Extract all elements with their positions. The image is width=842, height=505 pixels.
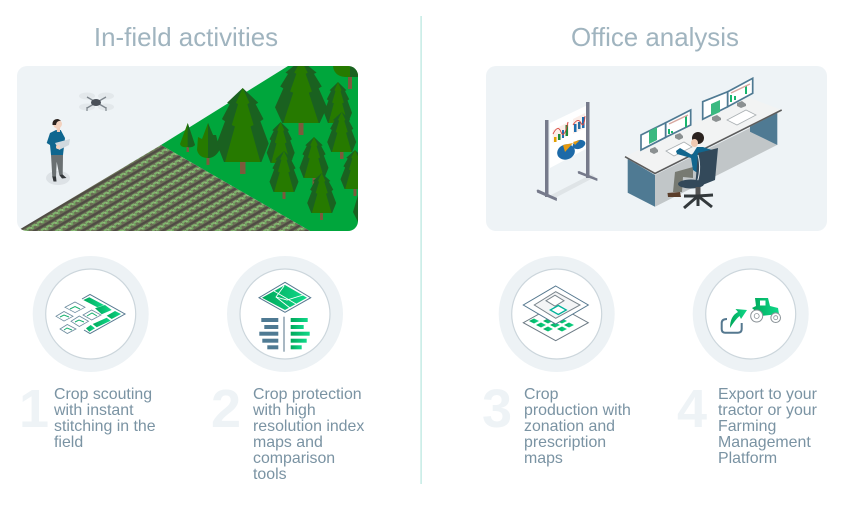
- step 4 text: [677, 379, 818, 467]
- step 1 text: with instant: [53, 402, 134, 419]
- step 3 text: maps: [524, 450, 563, 467]
- step 4 text: tractor or your: [718, 402, 818, 419]
- presentation board: [537, 102, 598, 201]
- step 2 text: with high: [252, 402, 316, 419]
- step 2 text: tools: [253, 466, 287, 483]
- step 1 text: Crop scouting: [54, 386, 152, 403]
- step 4 text: 4: [677, 379, 707, 439]
- person with tablet: [46, 119, 70, 185]
- step 2 text: maps and: [253, 434, 323, 451]
- panel: office illustration: [486, 66, 827, 231]
- step 4 text: Farming: [718, 418, 776, 435]
- desk: [625, 96, 782, 207]
- step 2 text: resolution index: [253, 418, 364, 435]
- step 4 icon: [693, 256, 809, 372]
- step 4 text: Platform: [718, 450, 777, 467]
- heading: office analysis: Office analysis: [571, 24, 739, 52]
- step 2 text: [211, 379, 364, 483]
- panel: in-field illustration: [17, 60, 370, 231]
- step 2 text: 2: [211, 379, 241, 439]
- step 3 text: production with: [524, 402, 631, 419]
- step 1 text: 1: [19, 379, 49, 439]
- step 3 text: Crop: [524, 386, 559, 403]
- step 1 text: field: [54, 434, 83, 451]
- step 1 icon: [33, 256, 149, 372]
- step 3 text: prescription: [524, 434, 606, 451]
- forest trees: [180, 60, 370, 222]
- step 3 text: zonation and: [524, 418, 615, 435]
- board charts: [553, 113, 587, 162]
- step 4 text: Export to your: [718, 386, 818, 403]
- step 3 text: 3: [482, 379, 512, 439]
- step 2 text: Crop protection: [253, 386, 362, 403]
- crop field: [17, 145, 310, 231]
- seated person in chair: [668, 132, 718, 208]
- step 4 text: Management: [718, 434, 811, 451]
- heading: in-field activities: In-field activities: [94, 24, 278, 52]
- step 3 icon: [499, 256, 615, 372]
- icon: drone: [79, 92, 114, 111]
- step 2 text: comparison: [253, 450, 335, 467]
- forest ground: [161, 66, 358, 231]
- step 2 icon: [227, 256, 343, 372]
- step 3 text: [482, 379, 631, 467]
- divider: [420, 16, 422, 484]
- step 1 text: stitching in the: [54, 418, 156, 435]
- monitors: [641, 78, 756, 156]
- step 1 text: [19, 379, 156, 451]
